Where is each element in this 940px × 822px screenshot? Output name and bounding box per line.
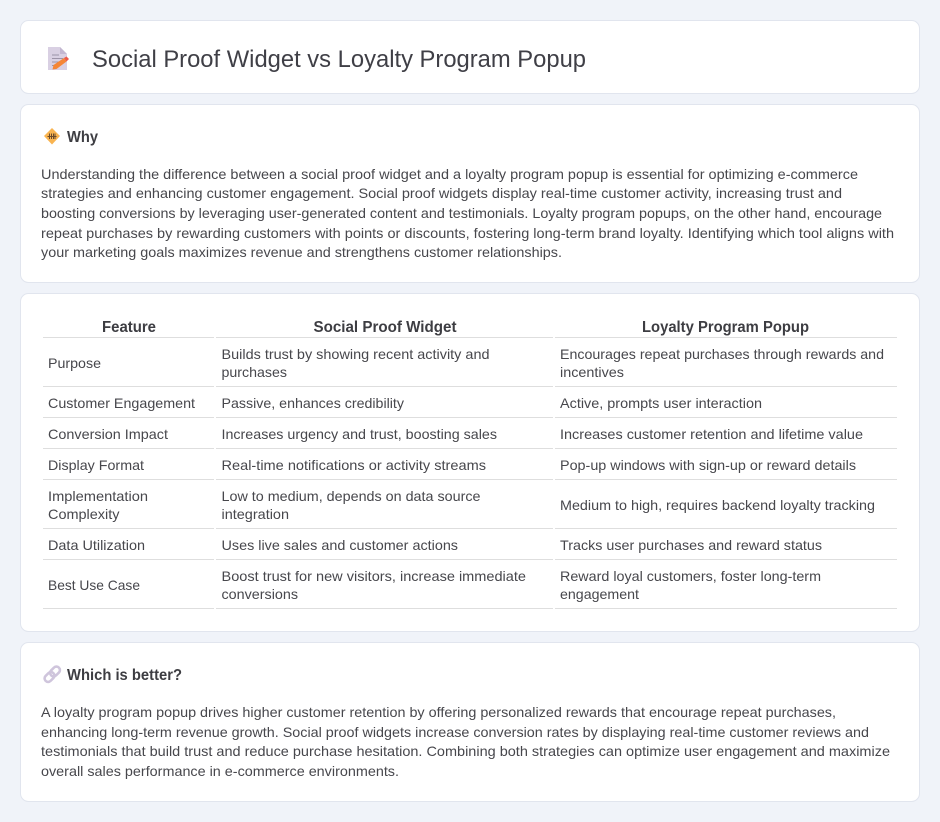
row: purpose: Encourages repeat purchases through rewards and <box>560 346 884 362</box>
row: purpose: purchases <box>222 364 287 380</box>
row: conversion impact: Increases urgency and trust, boosting sales <box>222 426 497 442</box>
row: best use case: conversions <box>222 586 298 602</box>
row: conversion impact <box>48 426 863 442</box>
row: display format: Real-time notifications or activity streams <box>222 457 486 473</box>
icon: document with pencil <box>48 47 69 70</box>
row: implementation complexity: Implementation <box>48 488 148 504</box>
table header row: Loyalty Program Popup <box>642 319 809 336</box>
icon: chain link <box>43 665 61 683</box>
text block: why explanation: Understanding the difference between a social proof widget and a loyalty program popup is essential for optimizing e-commerce <box>41 166 858 182</box>
row: conversion impact: Conversion Impact <box>48 426 168 442</box>
row: data utilization: Uses live sales and customer actions <box>222 537 458 553</box>
row: data utilization <box>48 537 822 553</box>
text block: verdict <box>41 704 890 779</box>
row: display format <box>48 457 856 473</box>
row: best use case <box>48 568 821 602</box>
text block: why explanation: your marketing goals maximizes revenue and strengthens customer relationships. <box>41 244 562 260</box>
row: implementation complexity: Complexity <box>48 506 120 522</box>
row: conversion impact: Increases customer retention and lifetime value <box>560 426 863 442</box>
row: customer engagement: Customer Engagement <box>48 395 195 411</box>
panel: why <box>20 104 920 282</box>
icon: diamond sign <box>44 128 60 144</box>
row: purpose: Builds trust by showing recent activity and <box>222 346 490 362</box>
row: data utilization: Tracks user purchases and reward status <box>560 537 822 553</box>
table header row <box>102 319 809 336</box>
row: implementation complexity: Low to medium, depends on data source <box>222 488 481 504</box>
table header row: Social Proof Widget <box>314 319 457 336</box>
title: Social Proof Widget vs Loyalty Program Popup <box>92 46 586 73</box>
row: best use case: Best Use Case <box>48 577 140 593</box>
row: customer engagement <box>48 395 762 411</box>
row: purpose <box>48 346 884 380</box>
panel: comparison table <box>20 294 920 632</box>
text block: verdict: enhancing long-term revenue growth. Social proof widgets increase conversion rates by displaying real-time customer reviews and <box>41 724 869 740</box>
row: purpose: incentives <box>560 364 624 380</box>
row: purpose: Purpose <box>48 355 101 371</box>
row: best use case: engagement <box>560 586 639 602</box>
heading: which is better: Which is better? <box>67 667 182 684</box>
text block: why explanation: strategies and enhancing customer engagement. Social proof widgets display real-time customer activity, increasing trust and <box>41 185 842 201</box>
row: implementation complexity: Medium to high, requires backend loyalty tracking <box>560 497 875 513</box>
text block: why explanation: boosting conversions by leveraging user-generated content and testimonials. Loyalty program popups, on the other hand, encourage <box>41 205 882 221</box>
row: customer engagement: Passive, enhances credibility <box>222 395 404 411</box>
text block: verdict: A loyalty program popup drives higher customer retention by offering personalized rewards that encourage repeat purchases, <box>41 704 836 720</box>
row: display format: Pop-up windows with sign-up or reward details <box>560 457 856 473</box>
heading: why: Why <box>67 129 98 146</box>
panel: title header <box>20 20 920 94</box>
row: implementation complexity <box>48 488 875 522</box>
text block: verdict: overall sales performance in e-commerce environments. <box>41 763 399 779</box>
text block: why explanation <box>41 166 894 260</box>
table header row: Feature <box>102 319 156 336</box>
row: customer engagement: Active, prompts user interaction <box>560 395 762 411</box>
panel: which is better <box>20 642 920 802</box>
text block: why explanation: repeat purchases by rewarding customers with points or discounts, fostering long-term brand loyalty. Identifying which tool aligns with <box>41 225 894 241</box>
text block: verdict: testimonials that build trust and reduce purchase hesitation. Combining both strategies can optimize user engagement and maximize <box>41 743 890 759</box>
row: display format: Display Format <box>48 457 144 473</box>
row: best use case: Reward loyal customers, foster long-term <box>560 568 821 584</box>
row: data utilization: Data Utilization <box>48 537 145 553</box>
table grid lines <box>43 337 897 609</box>
row: best use case: Boost trust for new visitors, increase immediate <box>222 568 526 584</box>
row: implementation complexity: integration <box>222 506 289 522</box>
